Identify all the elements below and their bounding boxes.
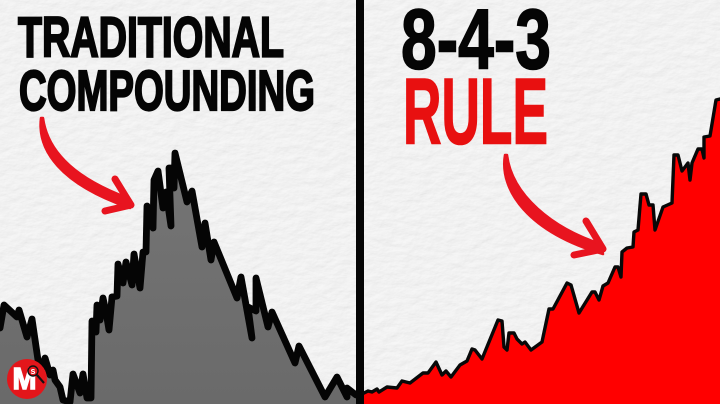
logo badge: M: [12, 361, 36, 396]
heading: traditional compounding: [18, 6, 315, 123]
panel: 8-4-3 rule: [364, 0, 720, 404]
heading: rule: RULE: [403, 58, 548, 164]
chart: red rising area: [364, 99, 720, 404]
panel: traditional compounding: [0, 6, 356, 404]
divider: [356, 0, 364, 404]
heading: traditional compounding: COMPOUNDING: [19, 59, 315, 123]
icon: magnifier: s: [30, 366, 36, 376]
arrow: red pointing at curve: [504, 155, 603, 255]
logo badge: [7, 359, 47, 399]
heading: traditional compounding: TRADITIONAL: [18, 6, 284, 70]
chart: gray falling area: [0, 153, 356, 404]
arrow: red pointing at peak: [41, 118, 131, 211]
